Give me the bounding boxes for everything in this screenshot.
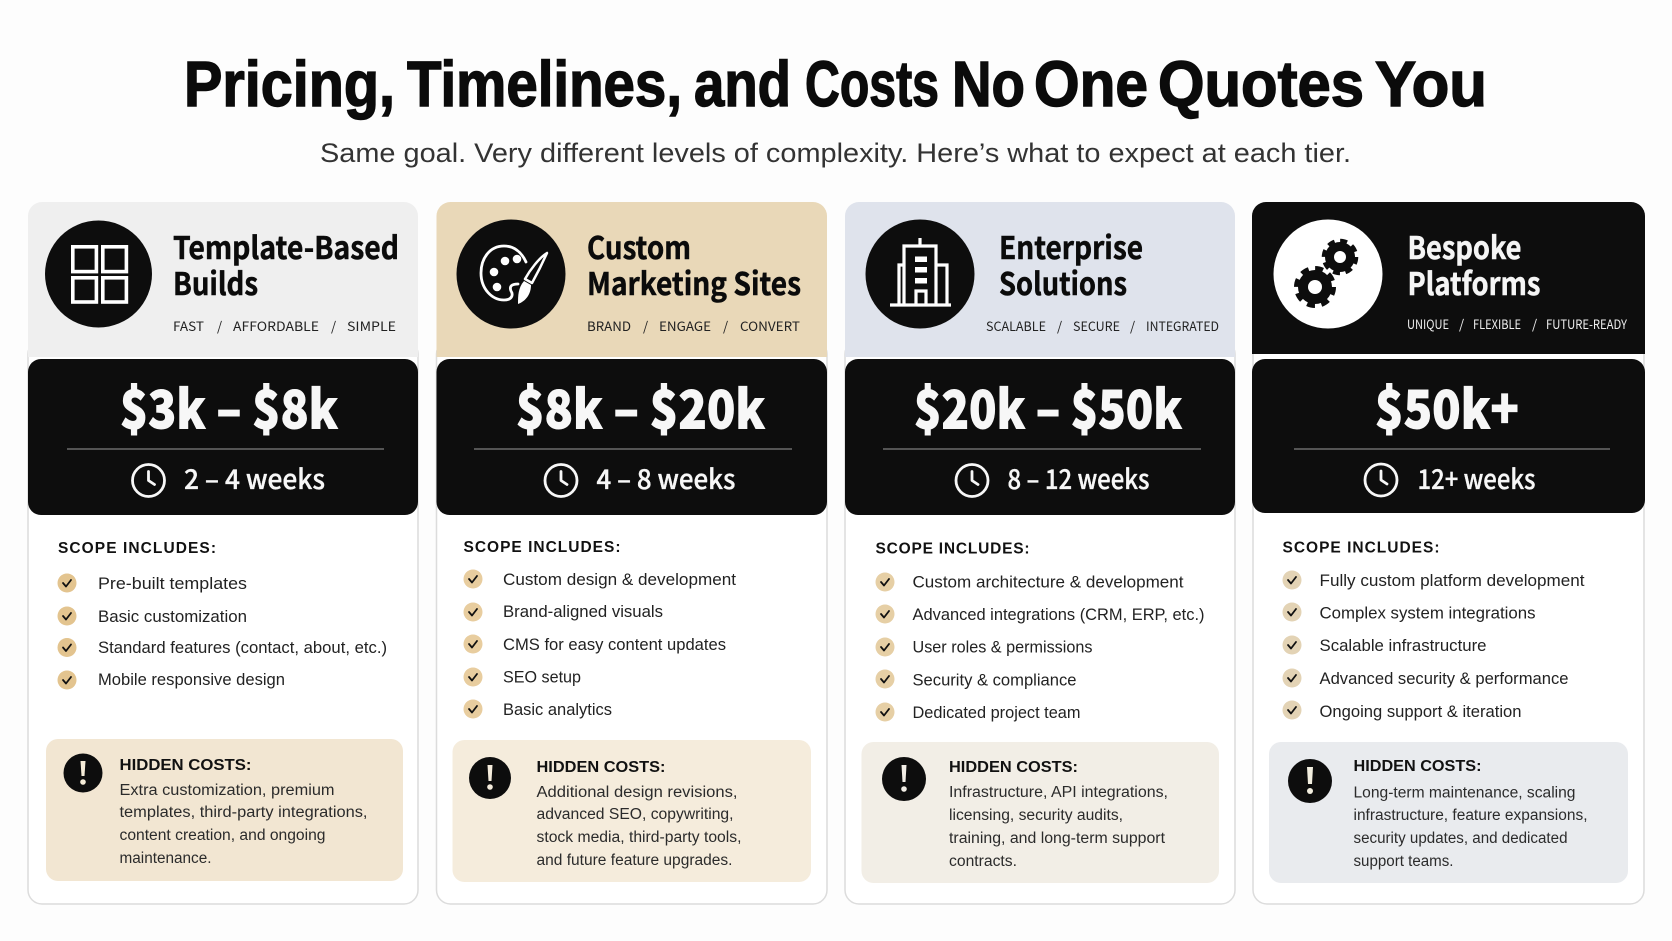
- callout: hidden costs: HIDDEN COSTS:: [120, 757, 252, 774]
- callout: hidden costs: maintenance.: [120, 850, 212, 867]
- scope list: [58, 574, 387, 690]
- scope list: Ongoing support & iteration: [1320, 702, 1522, 721]
- tagline: FAST: [173, 316, 204, 335]
- heading: Marketing Sites: [587, 259, 801, 304]
- scope list: Advanced integrations (CRM, ERP, etc.): [912, 605, 1204, 624]
- heading: [173, 223, 399, 304]
- scope list: Security & compliance: [912, 670, 1076, 690]
- tagline: /: [643, 316, 648, 335]
- callout: hidden costs: HIDDEN COSTS:: [1354, 758, 1482, 775]
- callout: hidden costs: support teams.: [1354, 853, 1454, 870]
- panel: custom marketing sites: [436, 202, 827, 904]
- scope list: Fully custom platform development: [1320, 571, 1585, 590]
- header panel: [845, 202, 1235, 357]
- scope heading: SCOPE INCLUDES:: [58, 540, 216, 557]
- scope heading: SCOPE INCLUDES:: [1282, 540, 1440, 556]
- heading: [1408, 223, 1540, 304]
- callout: hidden costs: stock media, third-party tools,: [536, 829, 742, 846]
- tagline: [986, 316, 1219, 335]
- scope list: Standard features (contact, about, etc.): [98, 638, 387, 657]
- tagline: /: [1459, 314, 1464, 333]
- callout: hidden costs: content creation, and ongoing: [120, 827, 326, 844]
- tagline: INTEGRATED: [1146, 316, 1219, 335]
- card body: [1253, 340, 1644, 904]
- callout: hidden costs: [452, 740, 811, 882]
- scope list: Brand-aligned visuals: [503, 602, 663, 621]
- scope list: CMS for easy content updates: [503, 635, 726, 654]
- heading: Template-Based: [173, 223, 399, 268]
- icon: alert: [64, 754, 102, 792]
- tagline: ENGAGE: [659, 316, 711, 335]
- callout: hidden costs: templates, third-party integrations,: [120, 804, 368, 821]
- header panel: [436, 202, 827, 357]
- panel: template-based builds: [28, 202, 418, 904]
- title: One: [1034, 48, 1148, 120]
- timeline: 4 – 8 weeks: [596, 458, 736, 497]
- tagline: SECURE: [1073, 316, 1120, 335]
- price panel: [1252, 359, 1645, 513]
- heading: Enterprise: [999, 223, 1143, 268]
- scope list: Complex system integrations: [1320, 604, 1536, 622]
- tagline: BRAND: [587, 316, 631, 335]
- icon: alert: [882, 757, 926, 801]
- scope list: Basic analytics: [503, 700, 612, 719]
- icon: template grid: [45, 220, 152, 328]
- scope list: Scalable infrastructure: [1320, 636, 1486, 655]
- heading: Custom: [587, 223, 691, 268]
- callout: hidden costs: contracts.: [949, 853, 1017, 870]
- subtitle: Same goal. Very different levels of complexity. Here’s what to expect at each tier.: [320, 138, 1351, 168]
- icon: clock: [1365, 464, 1397, 496]
- heading: Platforms: [1408, 259, 1540, 304]
- title: No: [952, 48, 1025, 120]
- heading: Bespoke: [1408, 223, 1522, 268]
- tagline: /: [723, 316, 728, 335]
- price: $50k+: [1375, 368, 1519, 444]
- callout: hidden costs: training, and long-term support: [949, 830, 1166, 847]
- callout: hidden costs: [1269, 742, 1628, 883]
- title: and: [694, 48, 791, 120]
- price: $8k – $20k: [516, 368, 765, 444]
- icon: gears: [1274, 220, 1382, 328]
- callout: hidden costs: HIDDEN COSTS:: [536, 759, 666, 776]
- callout: hidden costs: advanced SEO, copywriting,: [536, 806, 734, 823]
- tagline: /: [1057, 316, 1062, 335]
- scope list: [1282, 570, 1585, 721]
- heading: [999, 223, 1143, 304]
- callout: hidden costs: [46, 739, 403, 881]
- callout: hidden costs: HIDDEN COSTS:: [949, 759, 1078, 776]
- card body: [28, 340, 418, 904]
- title: Pricing,: [184, 48, 395, 120]
- tagline: [1407, 314, 1627, 333]
- scope list: Custom design & development: [503, 570, 736, 589]
- icon: clock: [132, 464, 164, 496]
- scope heading: SCOPE INCLUDES:: [876, 540, 1030, 558]
- icon: palette and brush: [456, 220, 566, 328]
- tagline: UNIQUE: [1407, 314, 1449, 333]
- scope list: Basic customization: [98, 607, 247, 626]
- scope list: SEO setup: [503, 668, 581, 686]
- callout: hidden costs: Extra customization, premium: [120, 782, 334, 799]
- title: Quotes: [1158, 48, 1364, 120]
- tagline: FLEXIBLE: [1473, 314, 1521, 333]
- icon: alert: [1288, 759, 1332, 803]
- tagline: CONVERT: [740, 316, 800, 335]
- title: You: [1375, 48, 1487, 120]
- callout: hidden costs: and future feature upgrades.: [536, 852, 732, 869]
- callout: hidden costs: security updates, and dedicated: [1354, 830, 1568, 847]
- timeline: 2 – 4 weeks: [184, 458, 325, 497]
- timeline: 8 – 12 weeks: [1008, 458, 1150, 497]
- icon: office building: [866, 220, 974, 328]
- card body: [436, 340, 827, 904]
- tagline: [587, 316, 800, 335]
- callout: hidden costs: Long-term maintenance, scaling: [1354, 784, 1576, 802]
- scope list: Pre-built templates: [98, 574, 247, 593]
- icon: clock: [956, 464, 988, 496]
- tagline: /: [1532, 314, 1537, 333]
- scope list: Dedicated project team: [912, 703, 1080, 722]
- scope list: User roles & permissions: [912, 638, 1092, 656]
- tagline: FUTURE-READY: [1546, 314, 1627, 333]
- title: Costs: [805, 48, 939, 120]
- price: $3k – $8k: [120, 368, 338, 444]
- scope list: [876, 572, 1204, 722]
- scope list: Advanced security & performance: [1320, 669, 1568, 688]
- icon: alert: [469, 757, 511, 799]
- callout: hidden costs: licensing, security audits,: [949, 807, 1123, 824]
- scope list: Custom architecture & development: [912, 572, 1184, 592]
- card body: [845, 340, 1235, 904]
- price panel: [28, 359, 418, 515]
- tagline: SCALABLE: [986, 316, 1046, 335]
- tagline: [173, 316, 396, 335]
- title: [184, 48, 1487, 120]
- heading: Solutions: [999, 259, 1127, 304]
- scope heading: SCOPE INCLUDES:: [464, 539, 620, 556]
- header panel: [1252, 202, 1645, 354]
- tagline: SIMPLE: [347, 316, 396, 335]
- callout: hidden costs: Additional design revisions,: [536, 784, 738, 801]
- timeline: 12+ weeks: [1418, 458, 1536, 497]
- price panel: [845, 359, 1235, 515]
- title: Timelines,: [407, 48, 682, 120]
- tagline: /: [331, 316, 336, 335]
- panel: enterprise solutions: [845, 202, 1235, 904]
- tagline: AFFORDABLE: [233, 316, 319, 335]
- callout: hidden costs: Infrastructure, API integrations,: [949, 784, 1168, 801]
- callout: hidden costs: [862, 742, 1219, 883]
- callout: hidden costs: infrastructure, feature expansions,: [1354, 807, 1588, 824]
- tagline: /: [217, 316, 222, 335]
- header panel: [28, 202, 418, 357]
- scope list: [464, 570, 736, 719]
- heading: Builds: [173, 259, 258, 304]
- price panel: [436, 359, 827, 515]
- tagline: /: [1130, 316, 1135, 335]
- scope list: Mobile responsive design: [98, 670, 285, 689]
- icon: clock: [545, 464, 577, 496]
- price: $20k – $50k: [914, 368, 1182, 444]
- heading: [587, 223, 801, 304]
- panel: bespoke platforms: [1252, 202, 1645, 904]
